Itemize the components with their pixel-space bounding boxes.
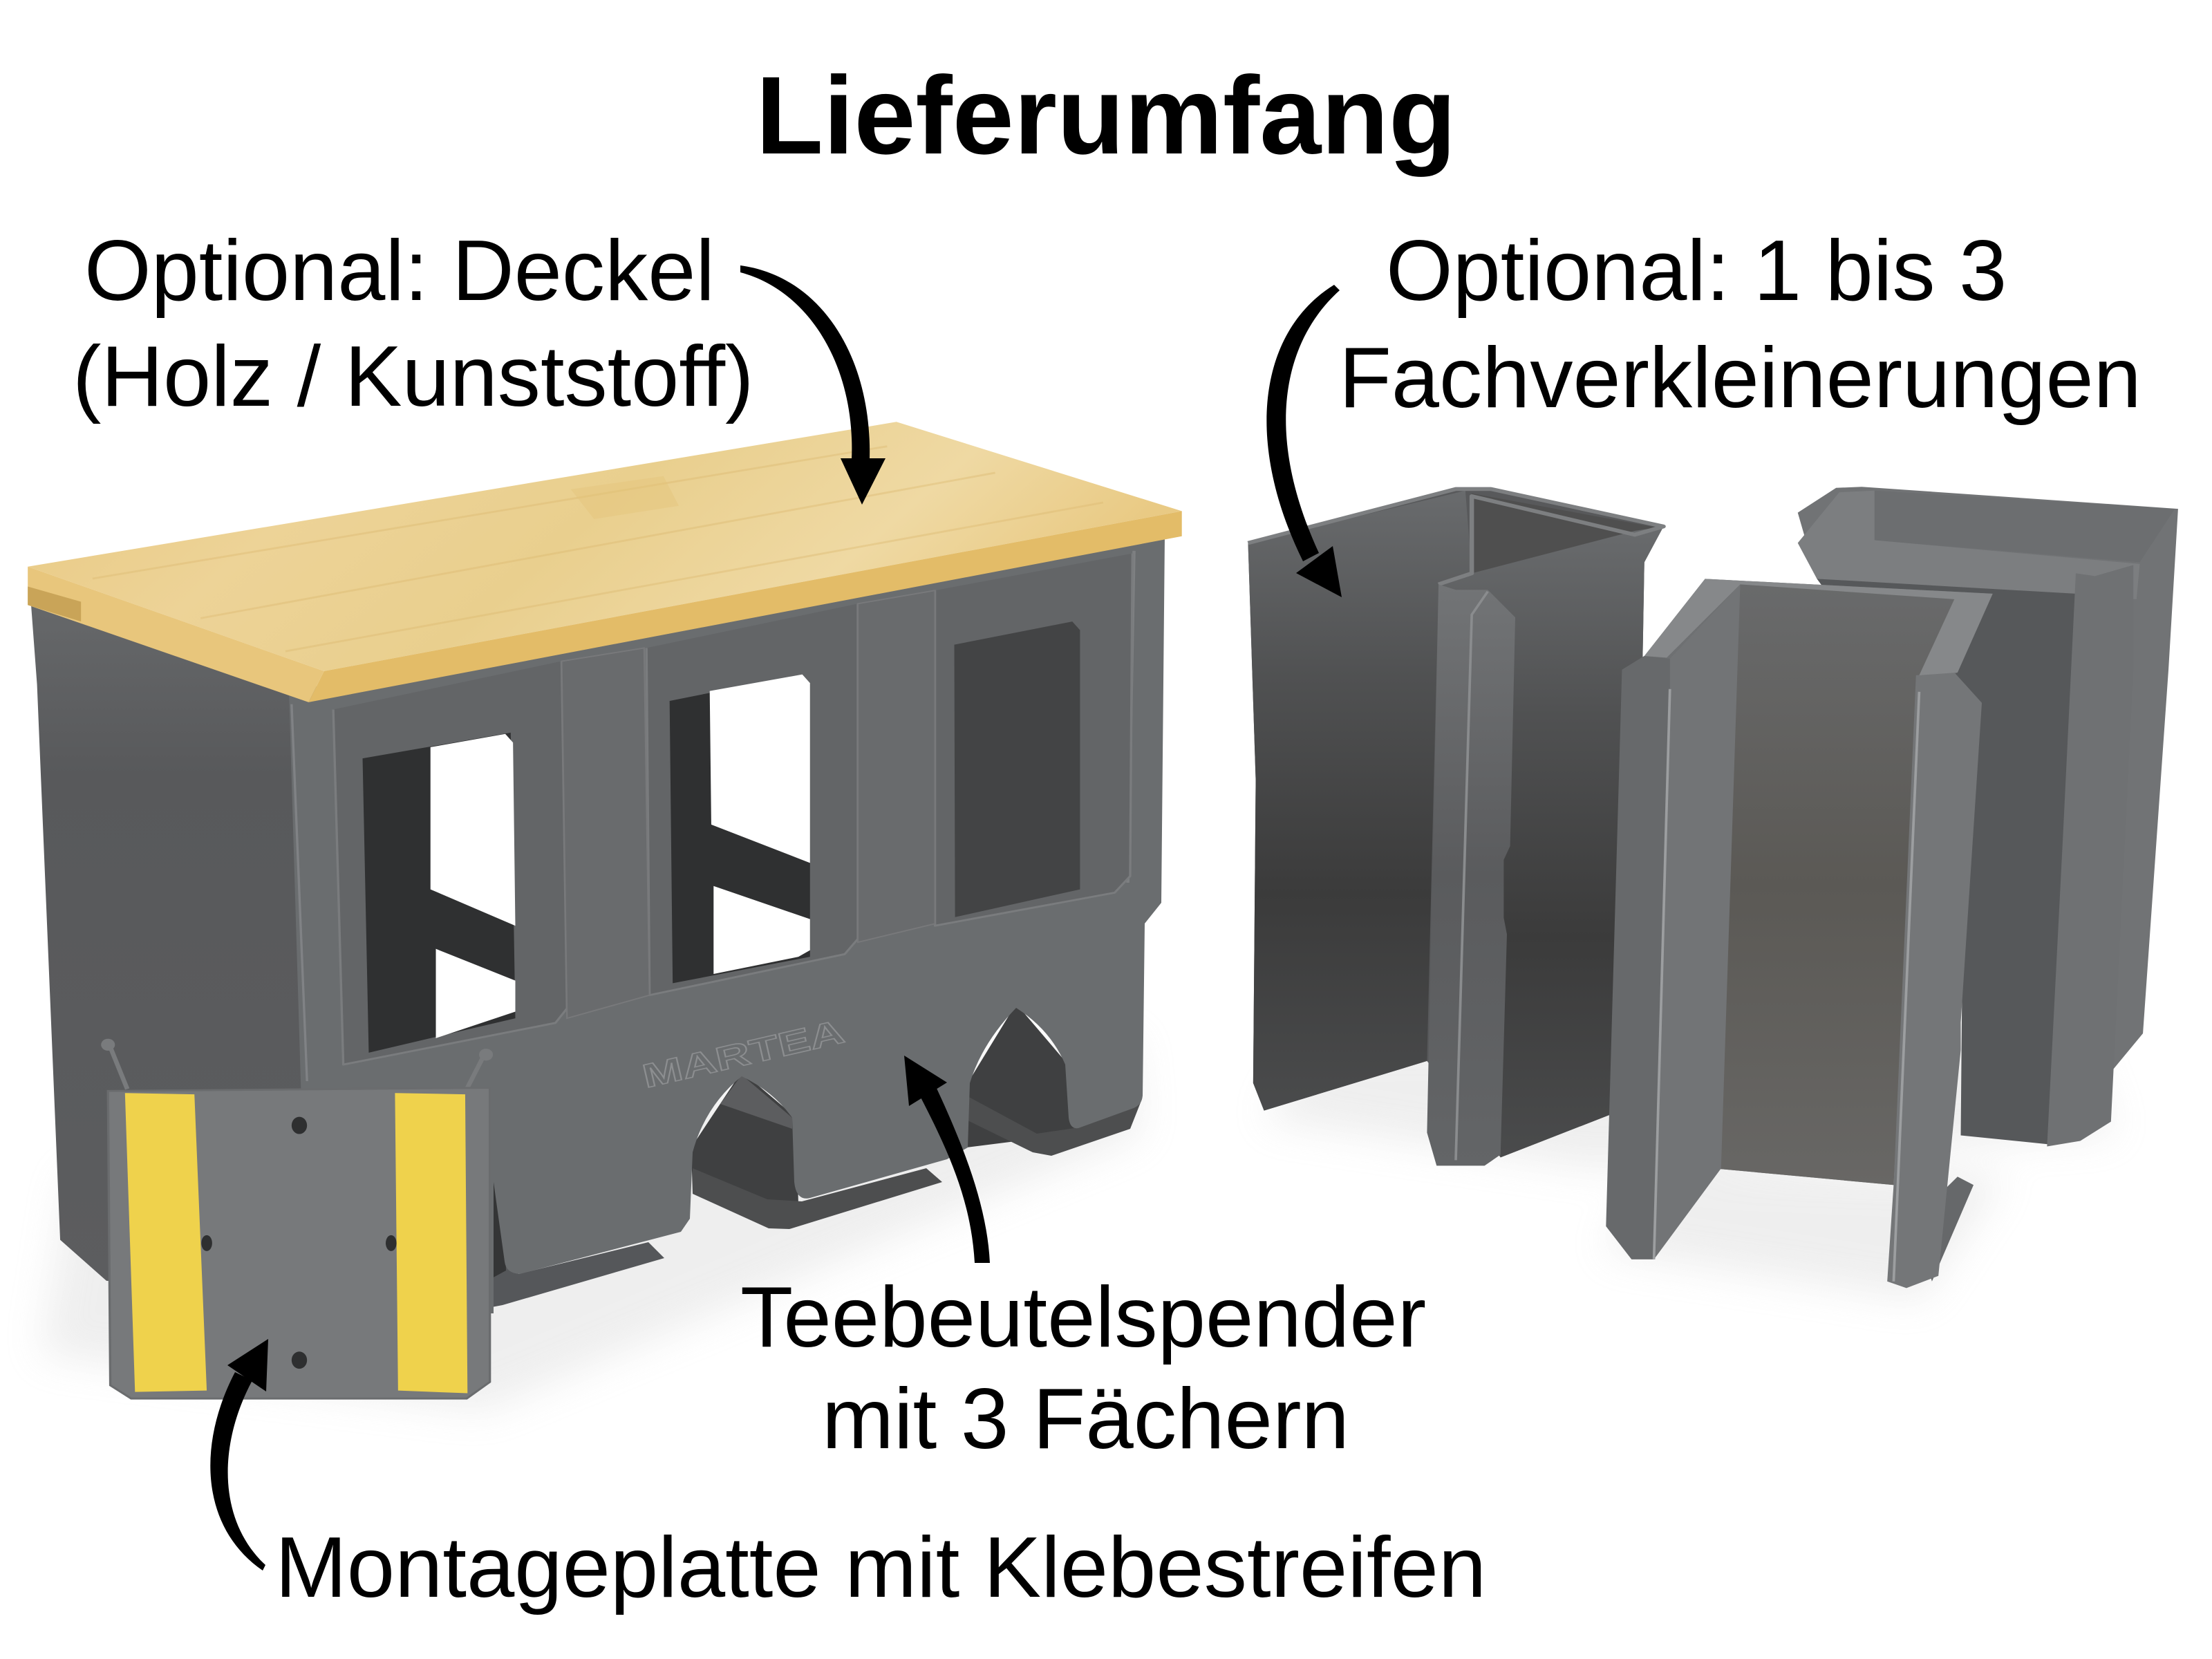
lid	[28, 422, 1182, 702]
soft floor shadows	[41, 1023, 2115, 1410]
arrow: to reducers	[1266, 285, 1342, 597]
reducer: front centre	[1606, 579, 1993, 1288]
arch interior 3	[966, 1004, 1142, 1156]
window 3	[954, 621, 1080, 917]
dispenser windows and lid	[28, 422, 1182, 1081]
window frame 3	[935, 554, 1132, 926]
label: mounting plate: Montageplatte mit Klebestreifen	[275, 1519, 1486, 1615]
plate	[108, 1088, 490, 1398]
window frame 1	[333, 662, 567, 1065]
arrow: to mounting plate	[210, 1339, 268, 1571]
reducer: left	[1248, 489, 1664, 1165]
compartment reducers	[1248, 487, 2178, 1288]
label: dispenser: Teebeutelspender	[740, 1269, 1426, 1365]
dispenser lower body	[289, 536, 1165, 1313]
label: dispenser: mit 3 Fächern	[822, 1371, 1349, 1467]
base tab 1	[488, 1168, 664, 1308]
arch interior 2	[691, 1071, 942, 1229]
adhesive strip right	[395, 1093, 467, 1394]
adhesive strip left	[125, 1093, 207, 1392]
hook knobs	[101, 1039, 493, 1060]
window 1	[363, 733, 515, 1053]
screw holes	[201, 1117, 397, 1369]
front wall	[289, 536, 1165, 1313]
window 2	[670, 675, 810, 983]
title: Lieferumfang	[756, 53, 1456, 177]
plate hooks	[108, 1042, 486, 1089]
mounting plate with adhesive strips	[101, 1039, 493, 1398]
label: lid: (Holz / Kunststoff)	[73, 328, 754, 424]
divider ribs	[561, 590, 935, 1018]
label: compartment reducers: Fachverkleinerungen	[1339, 330, 2141, 426]
arrow: to dispenser	[904, 1056, 990, 1263]
dispenser side wall	[31, 601, 308, 1293]
reducer: back right	[1798, 487, 2178, 1146]
label: lid: Optional: Deckel	[84, 223, 715, 319]
arrow: to lid	[740, 265, 885, 505]
brand embossing: MARTEA	[639, 1013, 847, 1095]
label: compartment reducers: Optional: 1 bis 3	[1386, 223, 2007, 319]
window frame 2	[646, 603, 858, 995]
front wall seam	[292, 704, 307, 1081]
